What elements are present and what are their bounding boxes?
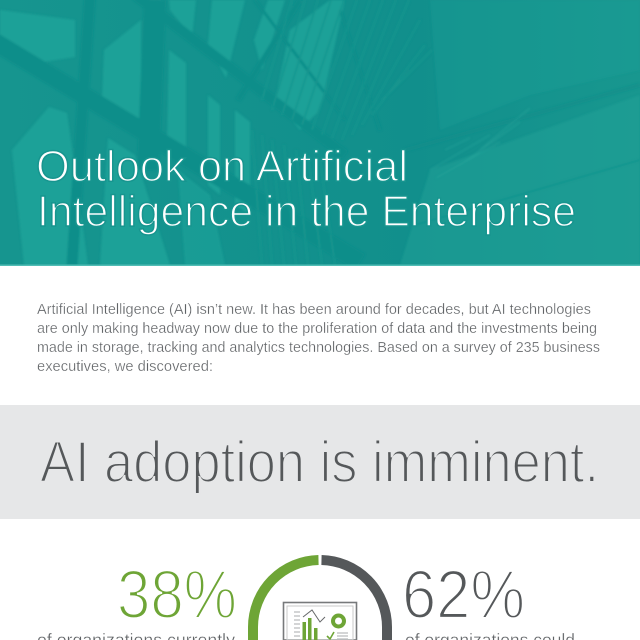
stat: 38 percent: 38% [117, 556, 237, 633]
title [36, 142, 576, 236]
ring chart [253, 560, 387, 640]
header banner [0, 0, 640, 266]
intro paragraph: made in storage, tracking and analytics technologies. Based on a survey of 235 business [37, 340, 600, 356]
intro paragraph [37, 302, 600, 375]
section heading band [0, 405, 640, 519]
intro paragraph: Artificial Intelligence (AI) isn’t new. It has been around for decades, but AI technologies [37, 302, 591, 318]
title: Outlook on Artificial [36, 142, 408, 191]
intro paragraph: executives, we discovered: [37, 359, 213, 375]
icon: dashboard [284, 602, 356, 640]
stat: 62 percent: 62% [402, 556, 525, 633]
stat: 38 percent [37, 556, 237, 640]
title: Intelligence in the Enterprise [37, 187, 576, 236]
intro paragraph: are only making headway now due to the proliferation of data and the investments being [37, 321, 597, 337]
